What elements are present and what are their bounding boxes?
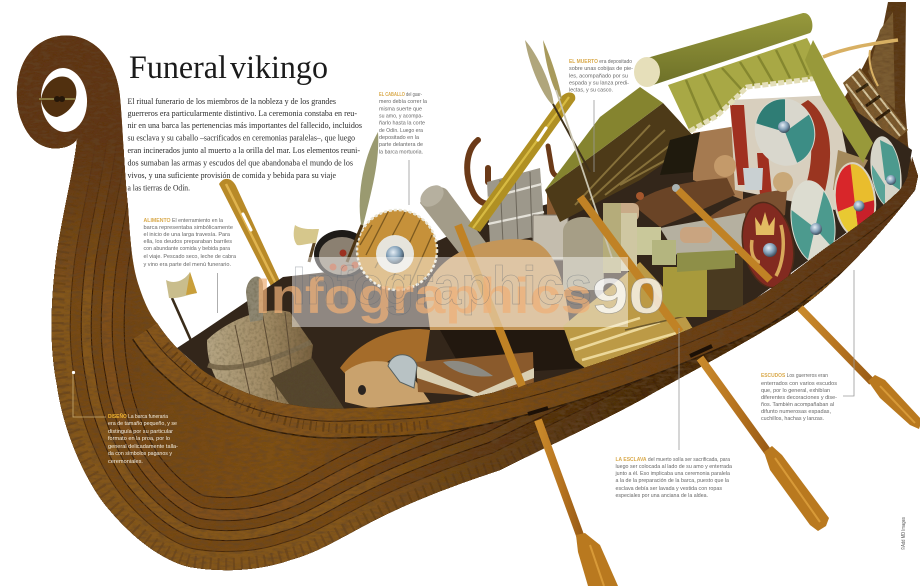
cargo: basket with red fruit (314, 230, 370, 278)
callout: diseño: general delicadamente talla- (108, 444, 178, 450)
tent right pillar (805, 40, 873, 163)
callout: escudos: cuchillos, hachas y lanzas. (761, 416, 824, 422)
yellow oar with slot (219, 179, 285, 296)
intro text: eran incinerados junto al muerto a la orilla del mar. Los elementos reuni- (128, 146, 360, 155)
cargo: olive crates (663, 255, 743, 317)
callout: alimento: el viaje. Pescado seco, leche de cabra (144, 254, 237, 260)
spears (347, 40, 612, 262)
callout: el caballo: depositado en la (379, 135, 420, 141)
upper yellow oar with slot (468, 93, 575, 232)
cargo: silver helmet (388, 355, 417, 388)
callout: diseño: era de tamaño pequeño, y se (108, 421, 177, 427)
tent roof log (634, 13, 812, 87)
sleeping warrior figures (607, 155, 793, 260)
callout: diseño: da con símbolos paganos y (108, 451, 172, 457)
leader lines (73, 100, 854, 450)
watermark text: Infographics (255, 268, 592, 324)
callout: diseño: formato en la proa, por lo (108, 436, 170, 442)
callout: escudos: ños. También acompañaban al (761, 402, 834, 408)
cargo: wooden boxes (533, 182, 573, 260)
cargo: horse body (340, 239, 585, 385)
callout: escudos: que, por lo general, exhibían (761, 388, 830, 394)
callout: alimento: barca representaba simbólicamente (144, 225, 233, 231)
cargo: antlers (467, 140, 568, 204)
title: Funeral vikingo (129, 50, 328, 86)
callout: el muerto: espada y su lanza predi- (569, 80, 629, 86)
cargo: gold planks (563, 262, 700, 372)
image credit: ©Add MD Images (900, 517, 907, 550)
intro text: guerreros era particularmente distintivo. La ceremonia constaba en reu- (128, 109, 357, 118)
callout: escudos (761, 373, 837, 422)
callout: el caballo: ñarlo hasta la corte (379, 121, 425, 127)
prow pin (39, 96, 75, 102)
watermark text: Infographics (292, 256, 592, 316)
cargo: second roll (563, 217, 604, 290)
prow spiral opening (39, 66, 89, 134)
intro text: su esclava y su caballo –sacrificados en ceremonias paralelas–, que luego (128, 134, 355, 142)
callout: el muerto: les, acompañado por su (569, 74, 628, 80)
shield: red and yellow (834, 162, 876, 233)
intro text: a las tierras de Odín. (128, 184, 190, 192)
callout: escudos: diferentes decoraciones y dise- (761, 395, 837, 401)
callout: el caballo: de Odín. Luego era (379, 128, 424, 134)
callout: alimento (144, 218, 237, 268)
callout: el caballo: su amo, y acompa- (379, 114, 423, 120)
watermark text (255, 256, 665, 324)
oar three (672, 184, 920, 429)
callout: la esclava: a la de la preparación de la barca, puesto que la (616, 478, 730, 484)
cargo: painted chest (416, 352, 534, 398)
callout: la esclava: junto a él. Eso implicaba una ceremonia paralela (615, 471, 731, 477)
callout: la esclava: esclava debía ser lavada y vestida con ropas (616, 486, 722, 492)
callout: alimento: el inicio de una larga travesía. Para (144, 232, 231, 238)
cargo: round gold shield (357, 210, 437, 290)
oar two (580, 197, 829, 531)
callout: el muerto: lectas, y su casco. (569, 88, 613, 94)
callout: la esclava: LA ESCLAVA del muerto solía ser sacrificada, para (616, 457, 731, 463)
marker dot (72, 371, 75, 374)
callout: diseño: DISEÑO La barca funeraria (108, 413, 169, 420)
axe and handle behind the hull (166, 272, 205, 372)
callout: la esclava (615, 457, 733, 499)
intro text (128, 97, 362, 192)
callout: el caballo: la barca mortuoria. (379, 150, 423, 156)
stern striped cloth (843, 68, 908, 143)
back wall with striped cloth (693, 95, 868, 210)
shield: top teal and white (754, 98, 816, 166)
intro text: nir en una barca las pertenencias más importantes del fallecido, incluidos (128, 121, 362, 130)
intro text: El ritual funerario de los miembros de la nobleza y de los grandes (128, 97, 336, 106)
tent roof thatch (668, 38, 827, 132)
callout: el muerto: EL MUERTO era depositado (569, 59, 632, 65)
callout: diseño: distinguía por su particular (108, 429, 173, 435)
callout: alimento: ALIMENTO El enterramiento en la (144, 218, 224, 224)
cargo: gray barrel (487, 168, 545, 245)
callout: alimento: con abundante comida y bebida para (144, 246, 231, 252)
callout: el caballo (379, 92, 428, 156)
callout: la esclava: luego ser colocada al lado de su amo y enterrada (616, 464, 733, 470)
callout: el muerto: sobre unas cobijas de pie- (569, 66, 633, 72)
callout: el caballo: misma suerte que (379, 107, 422, 113)
rope on stern (823, 40, 898, 86)
callout: el muerto (569, 59, 633, 94)
cargo: wooden barrel (207, 276, 345, 412)
shield: white and teal (790, 180, 836, 260)
watermark text: 90 (592, 268, 665, 324)
callout: escudos: difunto numerosas espadas, (761, 409, 831, 415)
cargo: rolled blanket (416, 181, 490, 258)
shield: red with gold crown (736, 198, 800, 292)
callout: alimento: ella, los deudos preparaban barriles (144, 239, 232, 245)
cream and olive supply blocks (603, 203, 735, 273)
callout: diseño (108, 413, 178, 465)
callout: alimento: y vino era parte del menú funerario. (144, 262, 231, 268)
callout: el caballo: EL CABALLO del guar- (379, 92, 422, 98)
intro text: vivos, y una suficiente provisión de comida y bebida para su viaje (128, 171, 336, 180)
prow inner curl (41, 76, 76, 117)
watermark panel (292, 257, 628, 327)
callout: la esclava: especiales por una anciana de la aldea. (616, 493, 708, 499)
shield: teal far right (870, 136, 902, 204)
callout: el caballo: mero debía correr la (379, 99, 428, 105)
interior shadow of the boat (177, 100, 912, 412)
cargo: horse head (345, 361, 430, 408)
intro text: dos sumaban las armas y escudos del que abandonaba el mundo de los (128, 158, 353, 168)
callout: diseño: ceremoniales. (108, 459, 143, 465)
oar one (458, 225, 618, 586)
callout: el caballo: parte delantera de (379, 142, 423, 148)
stern post (843, 2, 915, 200)
callout: escudos: ESCUDOS Los guerreros eran (761, 373, 828, 379)
callout: escudos: enterrados con varios escudos (761, 381, 837, 387)
cargo: small axe (294, 225, 319, 262)
tent dark striped slope (545, 87, 700, 222)
